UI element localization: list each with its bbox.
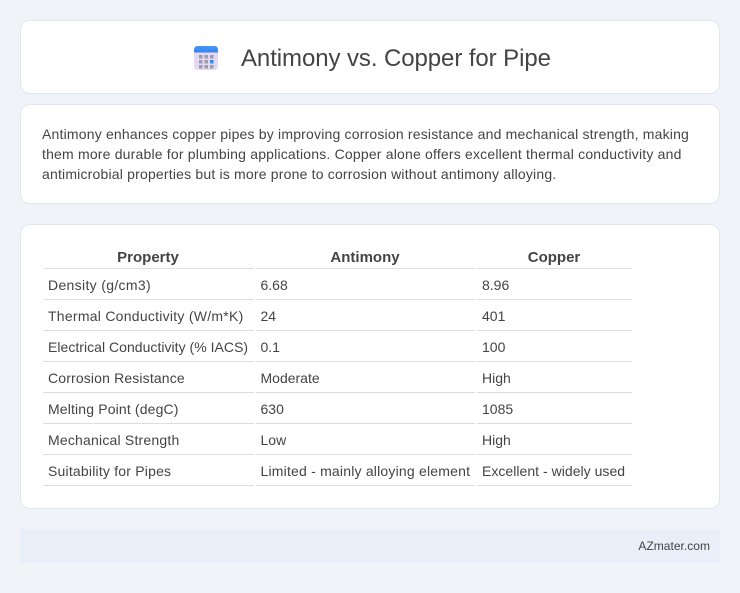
value: copper suitability: Excellent - widely used <box>482 463 625 479</box>
icon: calendar <box>194 46 218 70</box>
value: antimony density: 6.68 <box>260 277 288 293</box>
table header: Antimony: Antimony <box>330 248 400 266</box>
panel: summary <box>20 104 720 204</box>
row: mechanical strength: Mechanical Strength <box>48 432 179 448</box>
panel: title card <box>20 20 720 94</box>
summary text: them more durable for plumbing applications. Copper alone offers excellent thermal conductivity and <box>42 146 682 162</box>
table header: Property: Property <box>117 248 179 266</box>
value: antimony corrosion resistance: Moderate <box>260 370 320 386</box>
table header: Copper: Copper <box>528 248 580 266</box>
value: copper mechanical strength: High <box>482 432 511 448</box>
value: copper density: 8.96 <box>482 277 509 293</box>
row: electrical conductivity: Electrical Conductivity (% IACS) <box>48 339 248 355</box>
row: melting point: Melting Point (degC) <box>48 401 179 417</box>
row: thermal conductivity: Thermal Conductivity (W/m*K) <box>48 308 244 324</box>
summary text: Antimony enhances copper pipes by improving corrosion resistance and mechanical strength, making <box>42 126 689 142</box>
value: antimony melting point: 630 <box>260 401 284 417</box>
value: antimony suitability: Limited - mainly alloying element <box>260 463 470 479</box>
value: copper thermal conductivity: 401 <box>482 308 505 324</box>
panel: comparison table <box>20 224 720 509</box>
value: copper corrosion resistance: High <box>482 370 511 386</box>
row: corrosion resistance: Corrosion Resistance <box>48 370 185 386</box>
footer bar <box>20 529 720 563</box>
summary text <box>42 126 689 182</box>
summary text: antimicrobial properties but is more prone to corrosion without antimony alloying. <box>42 166 556 182</box>
value: antimony thermal conductivity: 24 <box>260 308 276 324</box>
row: suitability for pipes: Suitability for Pipes <box>48 463 171 479</box>
value: antimony electrical conductivity: 0.1 <box>260 339 280 355</box>
value: copper melting point: 1085 <box>482 401 513 417</box>
row: density: Density (g/cm3) <box>48 277 151 293</box>
value: copper electrical conductivity: 100 <box>482 339 505 355</box>
footer credit: AZmater.com <box>638 539 710 553</box>
value: antimony mechanical strength: Low <box>260 432 286 448</box>
title: Antimony vs. Copper for Pipe <box>241 44 551 72</box>
